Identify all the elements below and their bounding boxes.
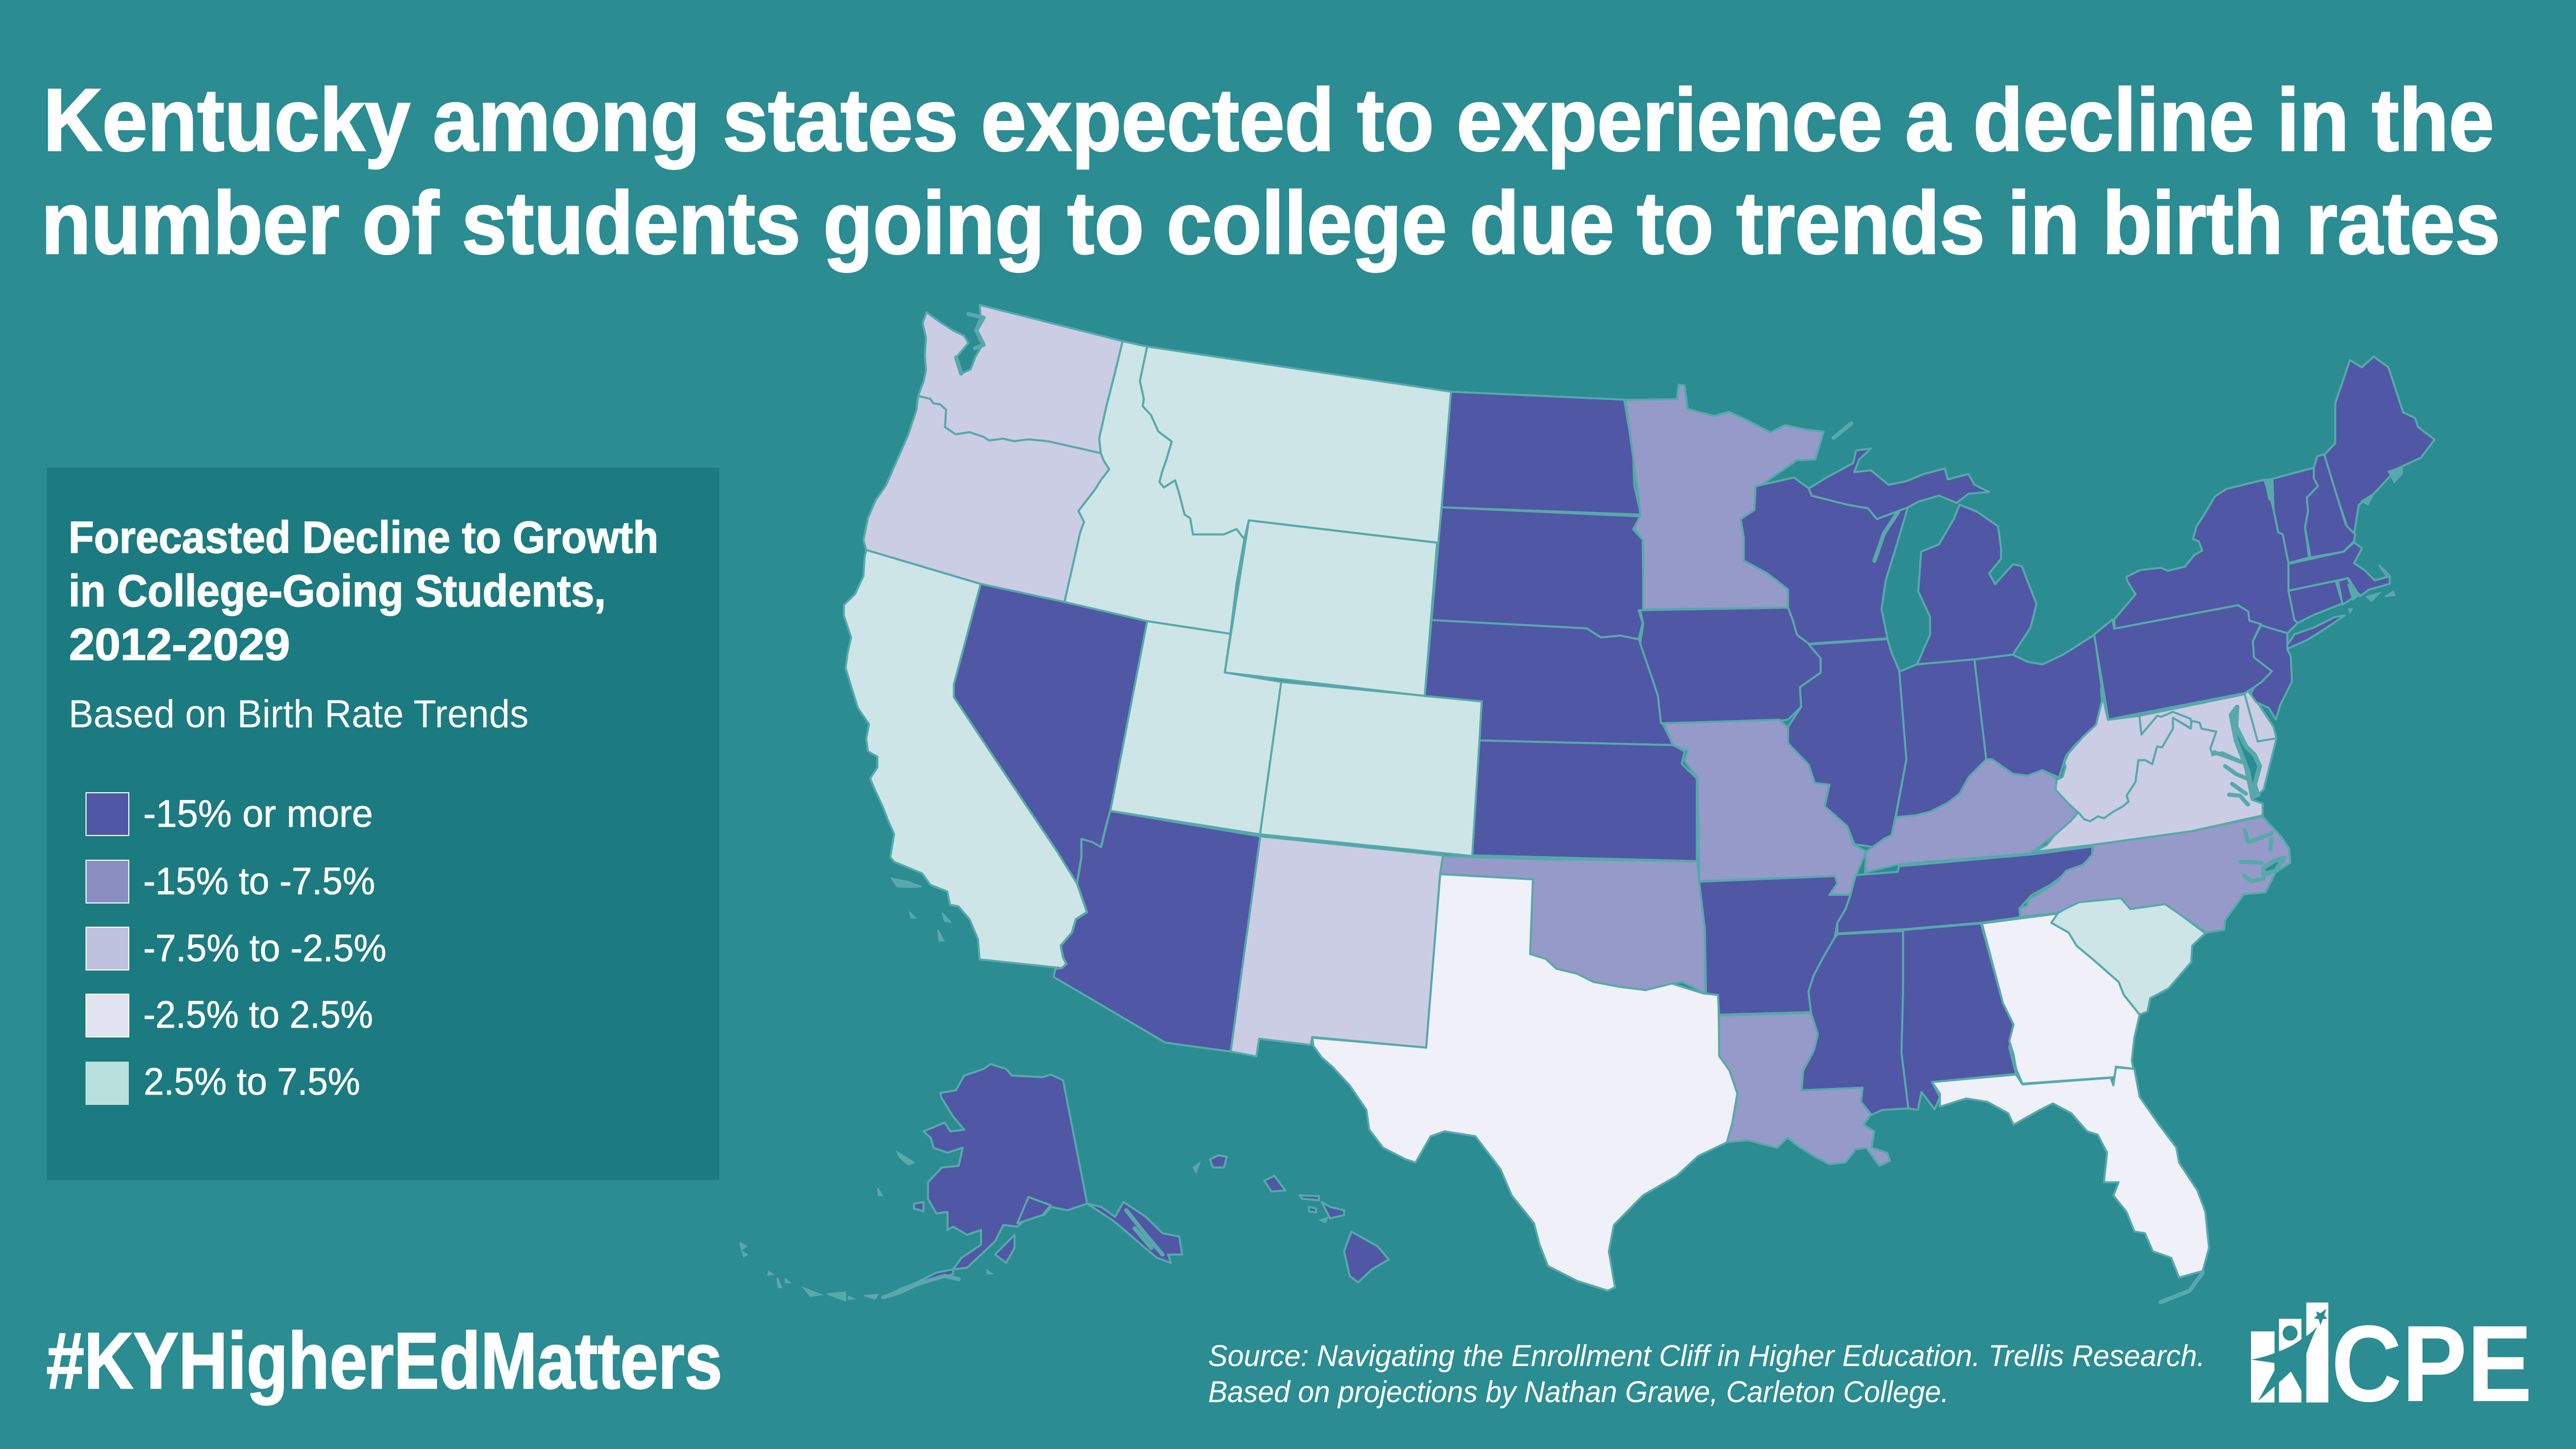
mid-Atlantic south states xyxy=(2020,688,2290,933)
state: New Hampshire xyxy=(2305,454,2355,557)
southwest and Alaska, Hawaii xyxy=(740,811,1737,1301)
source note: Based on projections by Nathan Grawe, Carleton College. xyxy=(1208,1375,1949,1409)
source note xyxy=(1208,1339,2205,1409)
state: Massachusetts xyxy=(2289,542,2389,596)
state: New York xyxy=(2114,480,2345,655)
state: Iowa xyxy=(1640,608,1821,723)
hashtag: #KYHigherEdMatters xyxy=(46,1316,722,1405)
legend heading: 2012-2029 xyxy=(69,620,290,670)
state: North Carolina xyxy=(2020,816,2290,933)
state: Hawaii xyxy=(1193,1155,1389,1283)
Long Island xyxy=(2280,616,2345,655)
state: South Dakota xyxy=(1432,507,1644,639)
state: Wisconsin xyxy=(1741,478,1908,644)
state: Texas xyxy=(1312,874,1737,1291)
panel: legend xyxy=(47,468,719,1180)
western states xyxy=(844,305,1697,968)
title xyxy=(41,71,2500,272)
state: Louisiana xyxy=(1719,1013,1890,1166)
Florida Keys xyxy=(2161,1273,2203,1302)
state: Utah xyxy=(1110,621,1281,834)
state: Arkansas xyxy=(1699,876,1851,1015)
Maine coastal islands xyxy=(2362,467,2402,505)
legend item: -15% to -7.5%: -15% to -7.5% xyxy=(143,860,375,902)
state: Oklahoma xyxy=(1440,856,1705,993)
state: Nevada xyxy=(954,584,1147,883)
Alaska panhandle xyxy=(1087,1202,1182,1263)
Lake Champlain xyxy=(2265,479,2274,503)
legend heading: in College-Going Students, xyxy=(69,566,606,616)
state: Minnesota xyxy=(1625,385,1824,609)
state: Nebraska xyxy=(1425,620,1673,745)
logo wordmark: CPE xyxy=(2331,1303,2532,1424)
legend item: -7.5% to -2.5%: -7.5% to -2.5% xyxy=(143,927,386,969)
legend heading xyxy=(69,513,658,670)
state: Missouri xyxy=(1664,720,1866,895)
legend subheading: Based on Birth Rate Trends xyxy=(69,692,529,736)
Aleutian arc xyxy=(883,1276,959,1297)
California channel islands xyxy=(892,878,951,941)
state: Arizona xyxy=(1054,811,1260,1051)
logo: CPE xyxy=(2251,1303,2532,1424)
legend heading: Forecasted Decline to Growth xyxy=(69,513,658,562)
state: Maine xyxy=(2324,356,2434,541)
state: West Virginia xyxy=(2056,688,2192,821)
state: Oregon xyxy=(863,396,1109,602)
Narragansett Bay and New England islands xyxy=(2348,585,2395,612)
Virginia rivers xyxy=(2214,752,2248,805)
Pamlico Sound xyxy=(2264,858,2284,875)
state: Michigan xyxy=(1809,423,2037,664)
state: Colorado xyxy=(1260,682,1482,856)
state: Vermont xyxy=(2273,468,2318,563)
Puget Sound xyxy=(956,314,984,373)
state: Georgia xyxy=(1982,913,2140,1084)
Alaska peninsula and islands xyxy=(883,1197,1051,1297)
Isle Royale xyxy=(1834,423,1852,438)
state: Indiana xyxy=(1896,659,1986,817)
state: Kansas xyxy=(1472,740,1697,861)
state: California xyxy=(844,550,1087,968)
state: Maryland and Delaware xyxy=(2140,690,2277,794)
source note: Source: Navigating the Enrollment Cliff in Higher Education. Trellis Research. xyxy=(1208,1339,2205,1373)
legend item: -2.5% to 2.5%: -2.5% to 2.5% xyxy=(143,993,373,1036)
state: Kentucky xyxy=(1865,759,2081,873)
Delaware border xyxy=(2245,695,2276,741)
state: Ohio xyxy=(1974,635,2104,777)
state: North Dakota xyxy=(1442,391,1641,515)
state: Tennessee xyxy=(1837,846,2092,933)
Chesapeake Bay xyxy=(2231,707,2260,797)
North Carolina sounds xyxy=(2241,830,2272,881)
icon: figure reaching for star on bars xyxy=(2251,1303,2328,1403)
state: Virginia xyxy=(2034,718,2263,852)
state: Wyoming xyxy=(1225,520,1437,696)
state: Montana xyxy=(1140,347,1451,543)
state: Alabama xyxy=(1902,924,2016,1110)
Green Bay xyxy=(1874,512,1898,560)
state: Idaho xyxy=(1064,341,1244,634)
northeast states xyxy=(2094,454,2395,720)
central and Great Lakes states xyxy=(1625,356,2434,895)
state: Illinois xyxy=(1788,639,1906,850)
state: Mississippi xyxy=(1802,931,1908,1115)
legend item: -15% or more: -15% or more xyxy=(143,792,373,835)
state: Rhode Island xyxy=(2338,578,2355,605)
legend item: 2.5% to 7.5%: 2.5% to 7.5% xyxy=(144,1060,360,1103)
map: United States forecast choropleth xyxy=(740,305,2434,1302)
Alaska panhandle channels xyxy=(1126,1210,1163,1255)
state: Alaska xyxy=(740,1064,1182,1301)
state: Florida xyxy=(1932,1067,2209,1277)
state: Connecticut xyxy=(2289,581,2343,623)
state: South Carolina xyxy=(2052,898,2206,1015)
Aleutian and outlying islands xyxy=(740,1152,992,1301)
state: New Jersey xyxy=(2250,625,2292,720)
southeast states xyxy=(1699,846,2209,1302)
state: Pennsylvania xyxy=(2094,605,2272,720)
state: Washington xyxy=(918,305,1123,453)
state: New Mexico xyxy=(1231,837,1443,1056)
